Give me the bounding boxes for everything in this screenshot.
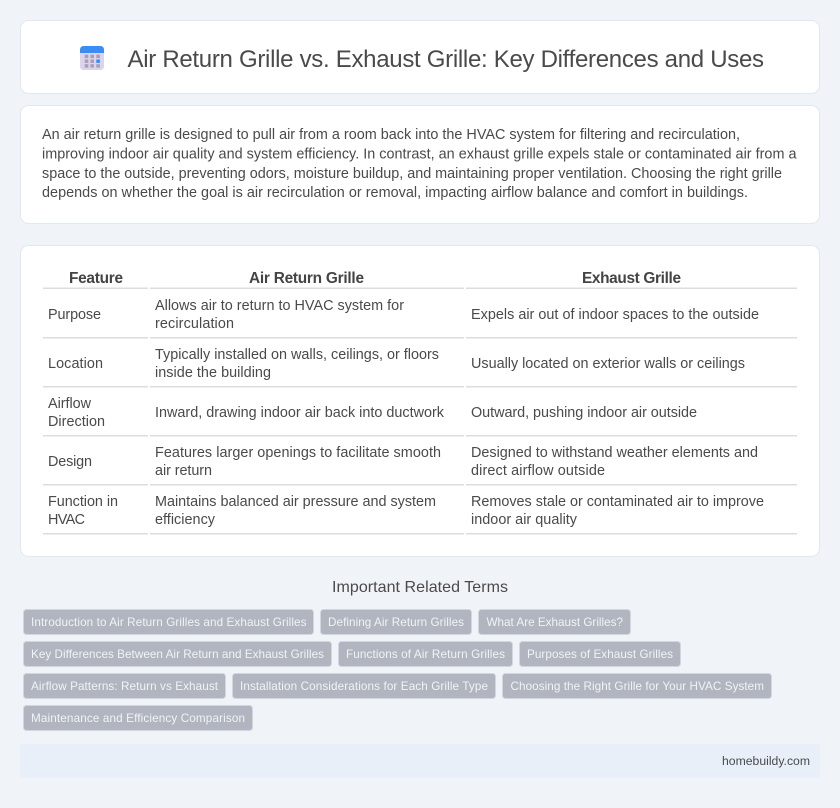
row: airflow direction	[43, 396, 797, 436]
tag cloud: related terms: What Are Exhaust Grilles?	[486, 616, 623, 629]
row: airflow direction: Outward, pushing indoor air outside	[471, 405, 697, 421]
footer	[20, 744, 820, 778]
panel: comparison table	[20, 246, 820, 556]
panel: introduction text	[20, 106, 820, 224]
row: airflow direction: Inward, drawing indoor air back into ductwork	[155, 405, 445, 421]
row: function in HVAC: efficiency	[155, 512, 216, 528]
panel: introduction text: An air return grille is designed to pull air from a room back into the HVAC system for filtering and recirculation,	[42, 127, 740, 143]
heading: important related terms: Important Related Terms	[332, 579, 508, 596]
row: location: Location	[48, 356, 103, 372]
row: airflow direction: Airflow	[48, 396, 92, 412]
row: purpose: Purpose	[48, 307, 101, 323]
row: design: air return	[155, 463, 212, 479]
row: purpose: recirculation	[155, 316, 234, 332]
tag cloud: related terms: Defining Air Return Grilles	[328, 616, 464, 629]
row: purpose: Expels air out of indoor spaces to the outside	[471, 307, 759, 323]
row: function in HVAC: Maintains balanced air pressure and system	[155, 494, 436, 510]
row: function in HVAC: Function in	[48, 494, 118, 510]
tag cloud: related terms: Maintenance and Efficiency Comparison	[31, 712, 245, 725]
row: location	[43, 347, 797, 388]
tag cloud: related terms: Introduction to Air Return Grilles and Exhaust Grilles	[31, 616, 307, 629]
footer: homebuildy.com	[722, 754, 810, 768]
icon: calendar	[80, 46, 104, 70]
table header row	[43, 270, 797, 289]
panel: introduction text: improving indoor air quality and system efficiency. In contrast, an exhaust grille expels stale or contaminated air from a	[42, 146, 796, 162]
table header row: Air Return Grille	[249, 270, 364, 287]
row: function in HVAC: Removes stale or contaminated air to improve	[471, 494, 764, 510]
row: function in HVAC	[43, 494, 797, 534]
tag cloud: related terms	[24, 610, 772, 730]
panel: introduction text: depends on whether the goal is air recirculation or removal, impacting airflow balance and comfort in buildings.	[42, 185, 748, 201]
header panel	[20, 20, 820, 94]
tag cloud: related terms: Functions of Air Return Grilles	[346, 648, 505, 661]
tag cloud: related terms: Key Differences Between Air Return and Exhaust Grilles	[31, 648, 324, 661]
row: location: inside the building	[155, 365, 271, 381]
row: purpose: Allows air to return to HVAC system for	[155, 298, 404, 314]
panel: introduction text: space to the outside, preventing odors, moisture buildup, and maintaining proper ventilation. Choosing the right grille	[42, 166, 782, 182]
row: function in HVAC: HVAC	[48, 512, 85, 528]
tag cloud: related terms: Choosing the Right Grille for Your HVAC System	[510, 680, 764, 693]
row: design: direct airflow outside	[471, 463, 605, 479]
row: design: Features larger openings to facilitate smooth	[155, 445, 441, 461]
table header row: Exhaust Grille	[582, 270, 681, 287]
row: location: Typically installed on walls, ceilings, or floors	[155, 347, 439, 363]
title: Air Return Grille vs. Exhaust Grille: Key Differences and Uses	[128, 46, 764, 73]
tag cloud: related terms: Installation Considerations for Each Grille Type	[240, 680, 488, 693]
row: design	[43, 445, 797, 486]
row: design: Designed to withstand weather elements and	[471, 445, 758, 461]
row: design: Design	[48, 454, 92, 470]
row: location: Usually located on exterior walls or ceilings	[471, 356, 745, 372]
row: purpose	[43, 298, 797, 338]
tag cloud: related terms: Airflow Patterns: Return vs Exhaust	[31, 680, 219, 693]
tag cloud: related terms: Purposes of Exhaust Grilles	[527, 648, 673, 661]
row: airflow direction: Direction	[48, 414, 105, 430]
table header row: Feature	[69, 270, 123, 287]
row: function in HVAC: indoor air quality	[471, 512, 578, 528]
